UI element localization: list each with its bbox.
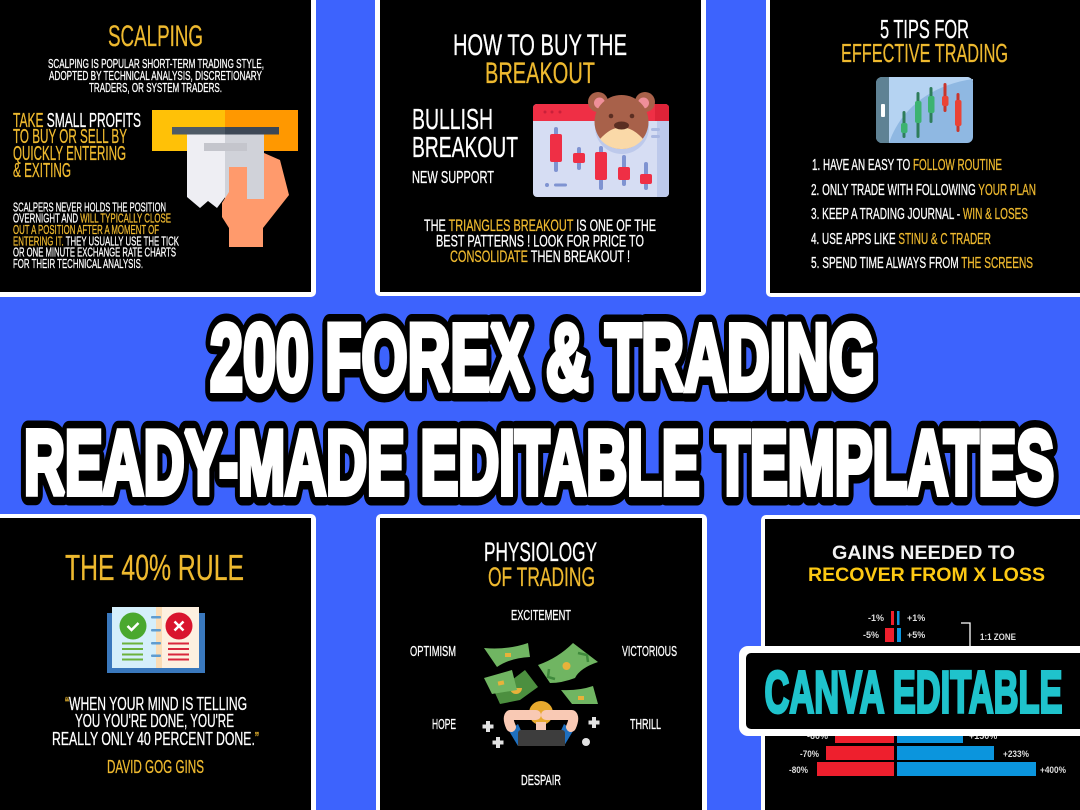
text block: quote: “WHEN YOUR MIND IS TELLING — [65, 693, 247, 714]
chart: loss and recovery bars: -80% — [789, 765, 808, 775]
labels: emotion words: OPTIMISM — [410, 644, 456, 660]
chart: loss and recovery bars: +150% — [969, 731, 997, 741]
text block: quote: YOU YOU'RE DONE, YOU'RE — [75, 710, 234, 731]
heading: physiology of trading — [484, 537, 597, 592]
chart: loss and recovery bars: -60% — [807, 731, 828, 741]
list: five trading tips — [811, 157, 1036, 272]
heading: scalping: SCALPING — [108, 20, 203, 53]
badge: canva editable — [739, 646, 1080, 736]
chart: loss and recovery bars: +1% — [907, 613, 925, 623]
text block: scalping definition — [48, 56, 264, 95]
list: five trading tips: 1. HAVE AN EASY TO FOLLOW ROUTINE — [812, 157, 1002, 174]
panel: gains needed to recover — [761, 515, 1080, 810]
text block: scalping definition: TRADERS, OR SYSTEM TRADERS. — [89, 80, 222, 95]
chart: loss and recovery bars: 1:1 ZONE — [980, 632, 1016, 643]
text block: scalpers description: OR ONE MINUTE EXCHANGE RATE CHARTS — [13, 245, 176, 260]
labels: emotion words: DESPAIR — [521, 773, 561, 789]
chart: loss and recovery bars: +233% — [1003, 749, 1029, 759]
icon: phone with candlesticks — [876, 77, 973, 143]
chart: loss and recovery bars: -70% — [800, 749, 819, 759]
icon: hand taking receipt from slot — [152, 110, 298, 247]
heading: 5 tips — [841, 14, 1008, 68]
text block: scalping definition: SCALPING IS POPULAR SHORT-TERM TRADING STYLE, — [48, 56, 264, 71]
list: five trading tips: 2. ONLY TRADE WITH FOLLOWING YOUR PLAN — [811, 182, 1036, 199]
text block: bullish breakout: BREAKOUT — [412, 132, 518, 164]
text block: take small profits: TO BUY OR SELL BY — [13, 126, 127, 148]
heading: how to buy the breakout — [453, 29, 627, 90]
list: five trading tips: 5. SPEND TIME ALWAYS FROM THE SCREENS — [811, 255, 1033, 272]
panel: how to buy the breakout — [375, 0, 706, 296]
list: five trading tips: 4. USE APPS LIKE STINU & C TRADER — [811, 231, 991, 248]
text block: scalpers description: FOR THEIR TECHNICAL ANALYSIS. — [13, 256, 143, 271]
heading: gains needed: GAINS NEEDED TO — [832, 543, 1015, 564]
text: quote author: DAVID GOG GINS — [107, 757, 204, 777]
heading: how to buy the breakout: BREAKOUT — [485, 57, 595, 90]
text block: scalpers description: OUT A POSITION AFTER A MOMENT OF — [13, 222, 159, 237]
panel: physiology of trading — [376, 514, 707, 810]
text block: scalpers description: OVERNIGHT AND WILL TYPICALLY CLOSE — [13, 211, 171, 226]
icon: trader with flying money — [482, 643, 600, 748]
icon: open book with check and cross — [107, 607, 205, 673]
text block: scalping definition: ADOPTED BY TECHNICAL ANALYSIS, DISCRETIONARY — [49, 68, 262, 83]
text block: triangles breakout: THE TRIANGLES BREAKOUT IS ONE OF THE — [424, 216, 656, 235]
icon: candlestick window with bear — [533, 92, 669, 197]
labels: emotion words: HOPE — [432, 717, 456, 733]
chart: loss and recovery bars: +5% — [907, 630, 925, 640]
text block: bullish breakout — [412, 104, 518, 187]
text block: scalpers description: ENTERING IT. THEY USUALLY USE THE TICK — [13, 233, 179, 248]
text block: take small profits: TAKE SMALL PROFITS — [13, 110, 141, 132]
labels: emotion words: VICTORIOUS — [622, 644, 677, 660]
text block: triangles breakout — [424, 216, 656, 266]
heading: gains needed: RECOVER FROM X LOSS — [808, 565, 1045, 586]
text block: take small profits: QUICKLY ENTERING — [13, 143, 126, 165]
chart: loss and recovery bars: +400% — [1040, 765, 1066, 775]
text block: triangles breakout: CONSOLIDATE THEN BREAKOUT ! — [450, 247, 630, 266]
text block: bullish breakout: NEW SUPPORT — [412, 167, 494, 187]
heading: 5 tips: 5 TIPS FOR — [880, 14, 969, 44]
chart: loss and recovery bars: -1% — [868, 613, 884, 623]
text block: bullish breakout: BULLISH — [412, 104, 493, 136]
panel: scalping — [0, 0, 316, 297]
heading: how to buy the breakout: HOW TO BUY THE — [453, 29, 627, 62]
labels: emotion words: THRILL — [630, 717, 661, 733]
labels: emotion words: EXCITEMENT — [511, 608, 571, 624]
text block: quote: REALLY ONLY 40 PERCENT DONE.” — [52, 728, 259, 749]
heading: the 40% rule: THE 40% RULE — [65, 547, 244, 588]
text block: scalpers description: SCALPERS NEVER HOLDS THE POSITION — [13, 199, 166, 214]
text block: scalpers description — [13, 199, 179, 271]
chart: loss and recovery bars: -5% — [863, 630, 879, 640]
labels: emotion words — [410, 608, 677, 789]
list: five trading tips: 3. KEEP A TRADING JOURNAL - WIN & LOSES — [811, 206, 1028, 223]
chart: loss and recovery bars — [789, 611, 1066, 776]
heading: physiology of trading: PHYSIOLOGY — [484, 537, 597, 567]
text block: take small profits: & EXITING — [13, 160, 71, 182]
panel: the 40% rule — [0, 514, 316, 810]
text block: triangles breakout: BEST PATTERNS ! LOOK FOR PRICE TO — [436, 232, 644, 250]
heading: gains needed — [808, 543, 1045, 586]
panel: 5 tips for effective trading — [766, 0, 1080, 297]
text block: quote — [52, 693, 259, 749]
text block: take small profits — [13, 110, 141, 182]
heading: physiology of trading: OF TRADING — [488, 562, 595, 592]
